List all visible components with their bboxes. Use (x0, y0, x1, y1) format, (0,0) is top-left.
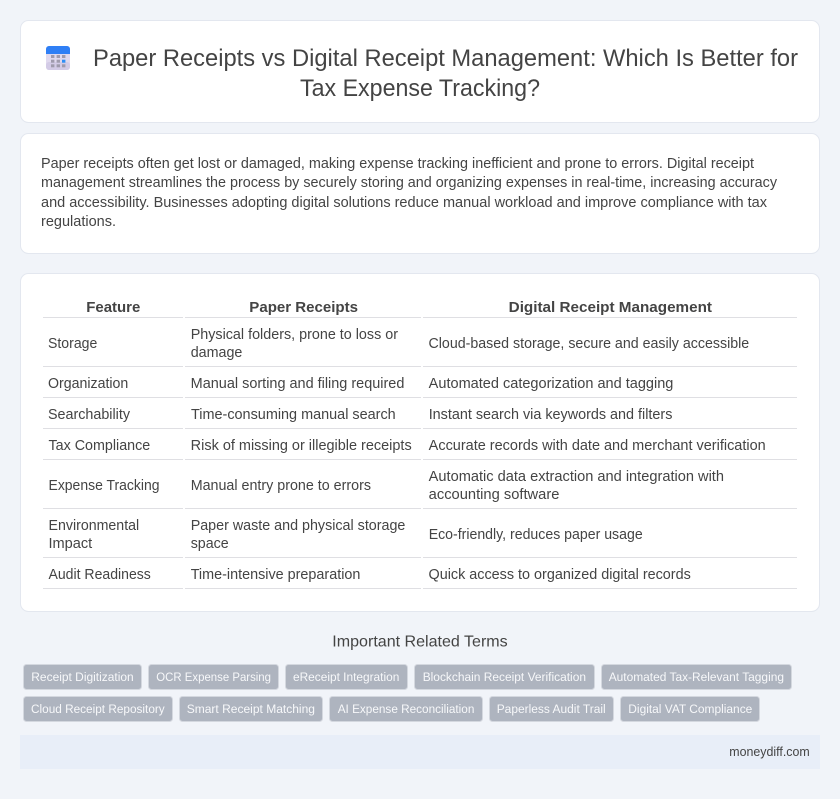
row: environmental impact: Eco-friendly, reduces paper usage (429, 527, 643, 543)
tag: smart receipt matching: Smart Receipt Matching (187, 702, 315, 716)
intro text: management streamlines the process by securely storing and organizing expenses in real-time, increasing accuracy (41, 175, 778, 191)
row: environmental impact: space (191, 536, 229, 552)
table header: Feature (86, 299, 140, 316)
tag: AI expense reconciliation: AI Expense Reconciliation (338, 702, 475, 716)
row: audit readiness: Time-intensive preparation (191, 567, 360, 583)
row: audit readiness: Audit Readiness (48, 567, 151, 583)
row: storage: Cloud-based storage, secure and easily accessible (428, 336, 749, 352)
title: Paper Receipts vs Digital Receipt Management: Which Is Better for (93, 45, 798, 72)
icon: calendar (46, 46, 70, 70)
row: organization: Manual sorting and filing required (191, 376, 404, 392)
row: searchability: Instant search via keywords and filters (429, 407, 672, 423)
intro text: Paper receipts often get lost or damaged, making expense tracking inefficient and prone to errors. Digital receipt (41, 156, 754, 172)
row: audit readiness: Quick access to organized digital records (428, 567, 691, 583)
row: searchability: Time-consuming manual search (191, 407, 396, 423)
tag: receipt digitization: Receipt Digitization (31, 670, 134, 684)
tag: eReceipt integration: eReceipt Integration (293, 670, 399, 684)
table header: Digital Receipt Management (509, 299, 712, 316)
row: storage (48, 327, 749, 361)
tag: AI expense reconciliation (330, 696, 482, 722)
row: environmental impact (48, 518, 643, 552)
row: environmental impact: Paper waste and physical storage (191, 518, 405, 534)
row: storage: Storage (48, 336, 97, 352)
row: tax compliance (48, 438, 766, 454)
row: organization: Automated categorization and tagging (429, 376, 673, 392)
row: storage: Physical folders, prone to loss or (191, 327, 398, 343)
tag: eReceipt integration (286, 664, 408, 690)
intro text (41, 156, 778, 230)
table header: Paper Receipts (249, 299, 358, 316)
heading: related terms: Important Related Terms (332, 634, 508, 650)
panel: header (20, 20, 820, 122)
row: searchability: Searchability (48, 407, 131, 423)
tag: paperless audit trail (490, 696, 614, 722)
panel: comparison table (20, 274, 820, 612)
tag: blockchain receipt verification: Blockchain Receipt Verification (423, 670, 586, 684)
tag: smart receipt matching (180, 696, 322, 722)
tag: OCR expense parsing: OCR Expense Parsing (156, 670, 271, 684)
tag: digital VAT compliance: Digital VAT Compliance (628, 702, 752, 716)
row: organization: Organization (48, 376, 128, 392)
tag: paperless audit trail: Paperless Audit Trail (497, 702, 606, 716)
row: expense tracking: Manual entry prone to errors (191, 478, 371, 494)
title (93, 45, 798, 102)
row: organization (48, 376, 673, 392)
row: expense tracking: Automatic data extraction and integration with (429, 469, 724, 485)
row: audit readiness (48, 567, 691, 583)
intro text: and accessibility. Businesses adopting digital solutions reduce manual workload and improve compliance with tax (41, 195, 768, 211)
row: expense tracking: Expense Tracking (48, 478, 160, 494)
row: tax compliance: Risk of missing or illegible receipts (191, 438, 412, 454)
row: expense tracking (48, 469, 724, 503)
footer: moneydiff.com (729, 744, 810, 759)
row: searchability (48, 407, 672, 423)
footer (20, 735, 820, 769)
row: environmental impact: Environmental (48, 518, 139, 534)
row: tax compliance: Accurate records with date and merchant verification (429, 438, 766, 454)
tag: OCR expense parsing (148, 664, 278, 690)
row: tax compliance: Tax Compliance (48, 438, 150, 454)
panel: introduction (20, 134, 820, 254)
tag: automated tax-relevant tagging (602, 664, 792, 690)
title: Tax Expense Tracking? (300, 75, 540, 102)
row: storage: damage (191, 345, 242, 361)
tag: digital VAT compliance (620, 696, 760, 722)
intro text: regulations. (41, 214, 116, 230)
table header (86, 299, 712, 316)
row: environmental impact: Impact (48, 536, 92, 552)
tag: receipt digitization (24, 664, 142, 690)
tag: cloud receipt repository: Cloud Receipt Repository (31, 702, 165, 716)
tag: blockchain receipt verification (414, 664, 594, 690)
tag cloud: related terms (24, 664, 792, 722)
tag: cloud receipt repository (24, 696, 172, 722)
row: expense tracking: accounting software (429, 487, 559, 503)
tag: automated tax-relevant tagging: Automated Tax-Relevant Tagging (609, 670, 784, 684)
